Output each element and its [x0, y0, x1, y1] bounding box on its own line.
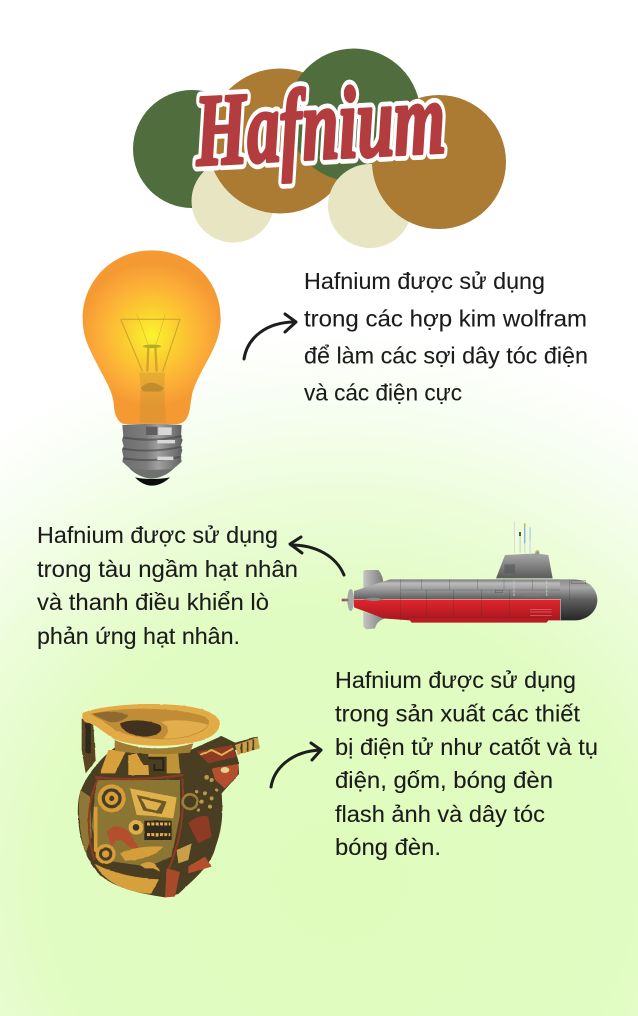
text block: tungsten alloys: trong các hợp kim wolfram [304, 306, 587, 332]
text block: tungsten alloys: và các điện cực [304, 380, 462, 406]
text block: electronics and ceramics: bóng đèn. [335, 834, 441, 860]
icon: submarine [342, 521, 597, 629]
text block: nuclear submarines: trong tàu ngầm hạt nhân [37, 556, 298, 582]
text block: nuclear submarines: Hafnium được sử dụng [37, 522, 278, 548]
arrow: bulb to text [244, 314, 296, 359]
title: Hafnium with painted circles: Hafnium [192, 62, 448, 188]
text block: tungsten alloys: để làm các sợi dây tóc điện [304, 342, 588, 368]
text block: electronics and ceramics: trong sản xuất các thiết [335, 700, 580, 726]
text block: tungsten alloys: Hafnium được sử dụng [304, 268, 545, 294]
text block: electronics and ceramics: điện, gốm, bóng đèn [335, 767, 553, 793]
text block: electronics and ceramics: Hafnium được sử dụng [335, 667, 576, 693]
text block: tungsten alloys [304, 268, 588, 406]
text block: electronics and ceramics: bị điện tử như catốt và tụ [335, 734, 598, 760]
arrow: vase to text [271, 743, 321, 787]
title: Hafnium with painted circles [133, 48, 506, 248]
text block: nuclear submarines: phản ứng hạt nhân. [37, 623, 240, 649]
text block: electronics and ceramics [335, 667, 598, 860]
title: Hafnium with painted circles: Hafnium [192, 62, 448, 188]
arrow: submarine to text [290, 537, 344, 575]
icon: decorated ceramic vase [78, 704, 260, 897]
text block: nuclear submarines: và thanh điều khiển lò [37, 589, 269, 615]
text block: electronics and ceramics: flash ảnh và dây tóc [335, 801, 545, 827]
text block: nuclear submarines [37, 522, 298, 649]
icon: light bulb [83, 250, 221, 486]
